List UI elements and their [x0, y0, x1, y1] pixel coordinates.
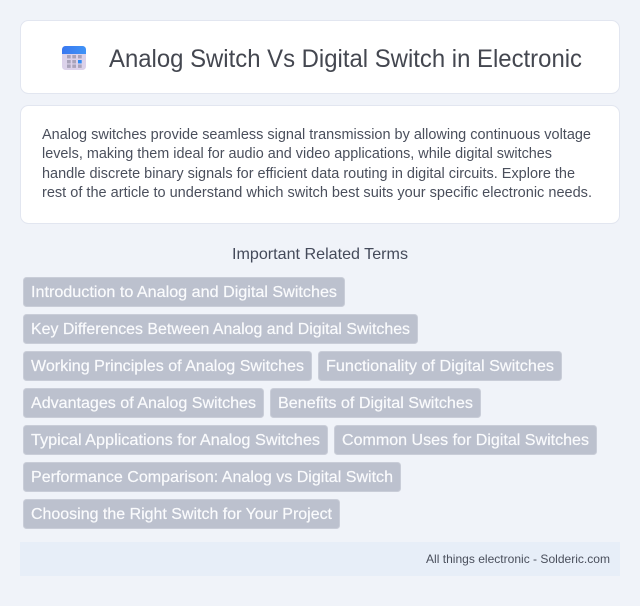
intro paragraph: handle discrete binary signals for efficient data routing in digital circuits. Explore the — [42, 166, 575, 182]
panel: header card — [20, 20, 620, 94]
chip: key differences: Key Differences Between Analog and Digital Switches — [31, 321, 410, 338]
chip: common uses: Common Uses for Digital Switches — [342, 432, 589, 449]
chip: key differences — [24, 314, 418, 344]
chip: functionality — [318, 352, 562, 380]
chip: functionality: Functionality of Digital Switches — [326, 358, 554, 375]
chip: benefits — [270, 388, 480, 418]
chip: performance comparison — [24, 462, 400, 492]
icon: calendar grid — [62, 46, 86, 70]
chip: introduction — [24, 278, 344, 306]
footer bar — [20, 542, 620, 576]
chip: working principles: Working Principles of Analog Switches — [31, 358, 304, 375]
chip: choosing the right switch — [24, 500, 340, 528]
chip: working principles — [24, 352, 312, 380]
chip: performance comparison: Performance Comparison: Analog vs Digital Switch — [31, 469, 393, 486]
intro paragraph: levels, making them ideal for audio and video applications, while digital switches — [42, 146, 552, 162]
panel: intro text card — [20, 106, 620, 224]
footer credit: All things electronic - Solderic.com — [426, 552, 610, 566]
chip: advantages — [24, 388, 264, 418]
chip: benefits: Benefits of Digital Switches — [278, 395, 473, 412]
heading: important related terms: Important Related Terms — [232, 246, 408, 263]
chip: advantages: Advantages of Analog Switches — [31, 395, 256, 412]
intro paragraph — [42, 127, 592, 201]
chip: typical applications — [24, 426, 328, 454]
chip: introduction: Introduction to Analog and Digital Switches — [31, 284, 337, 301]
intro paragraph: rest of the article to understand which switch best suits your specific electronic needs. — [42, 185, 592, 201]
intro paragraph: Analog switches provide seamless signal transmission by allowing continuous voltage — [42, 127, 591, 143]
panel: related term chips — [24, 278, 596, 528]
chip: typical applications: Typical Applications for Analog Switches — [31, 432, 320, 449]
chip: choosing the right switch: Choosing the Right Switch for Your Project — [31, 506, 333, 523]
title: Analog Switch Vs Digital Switch in Electronic — [109, 45, 582, 73]
chip: common uses — [334, 426, 596, 454]
